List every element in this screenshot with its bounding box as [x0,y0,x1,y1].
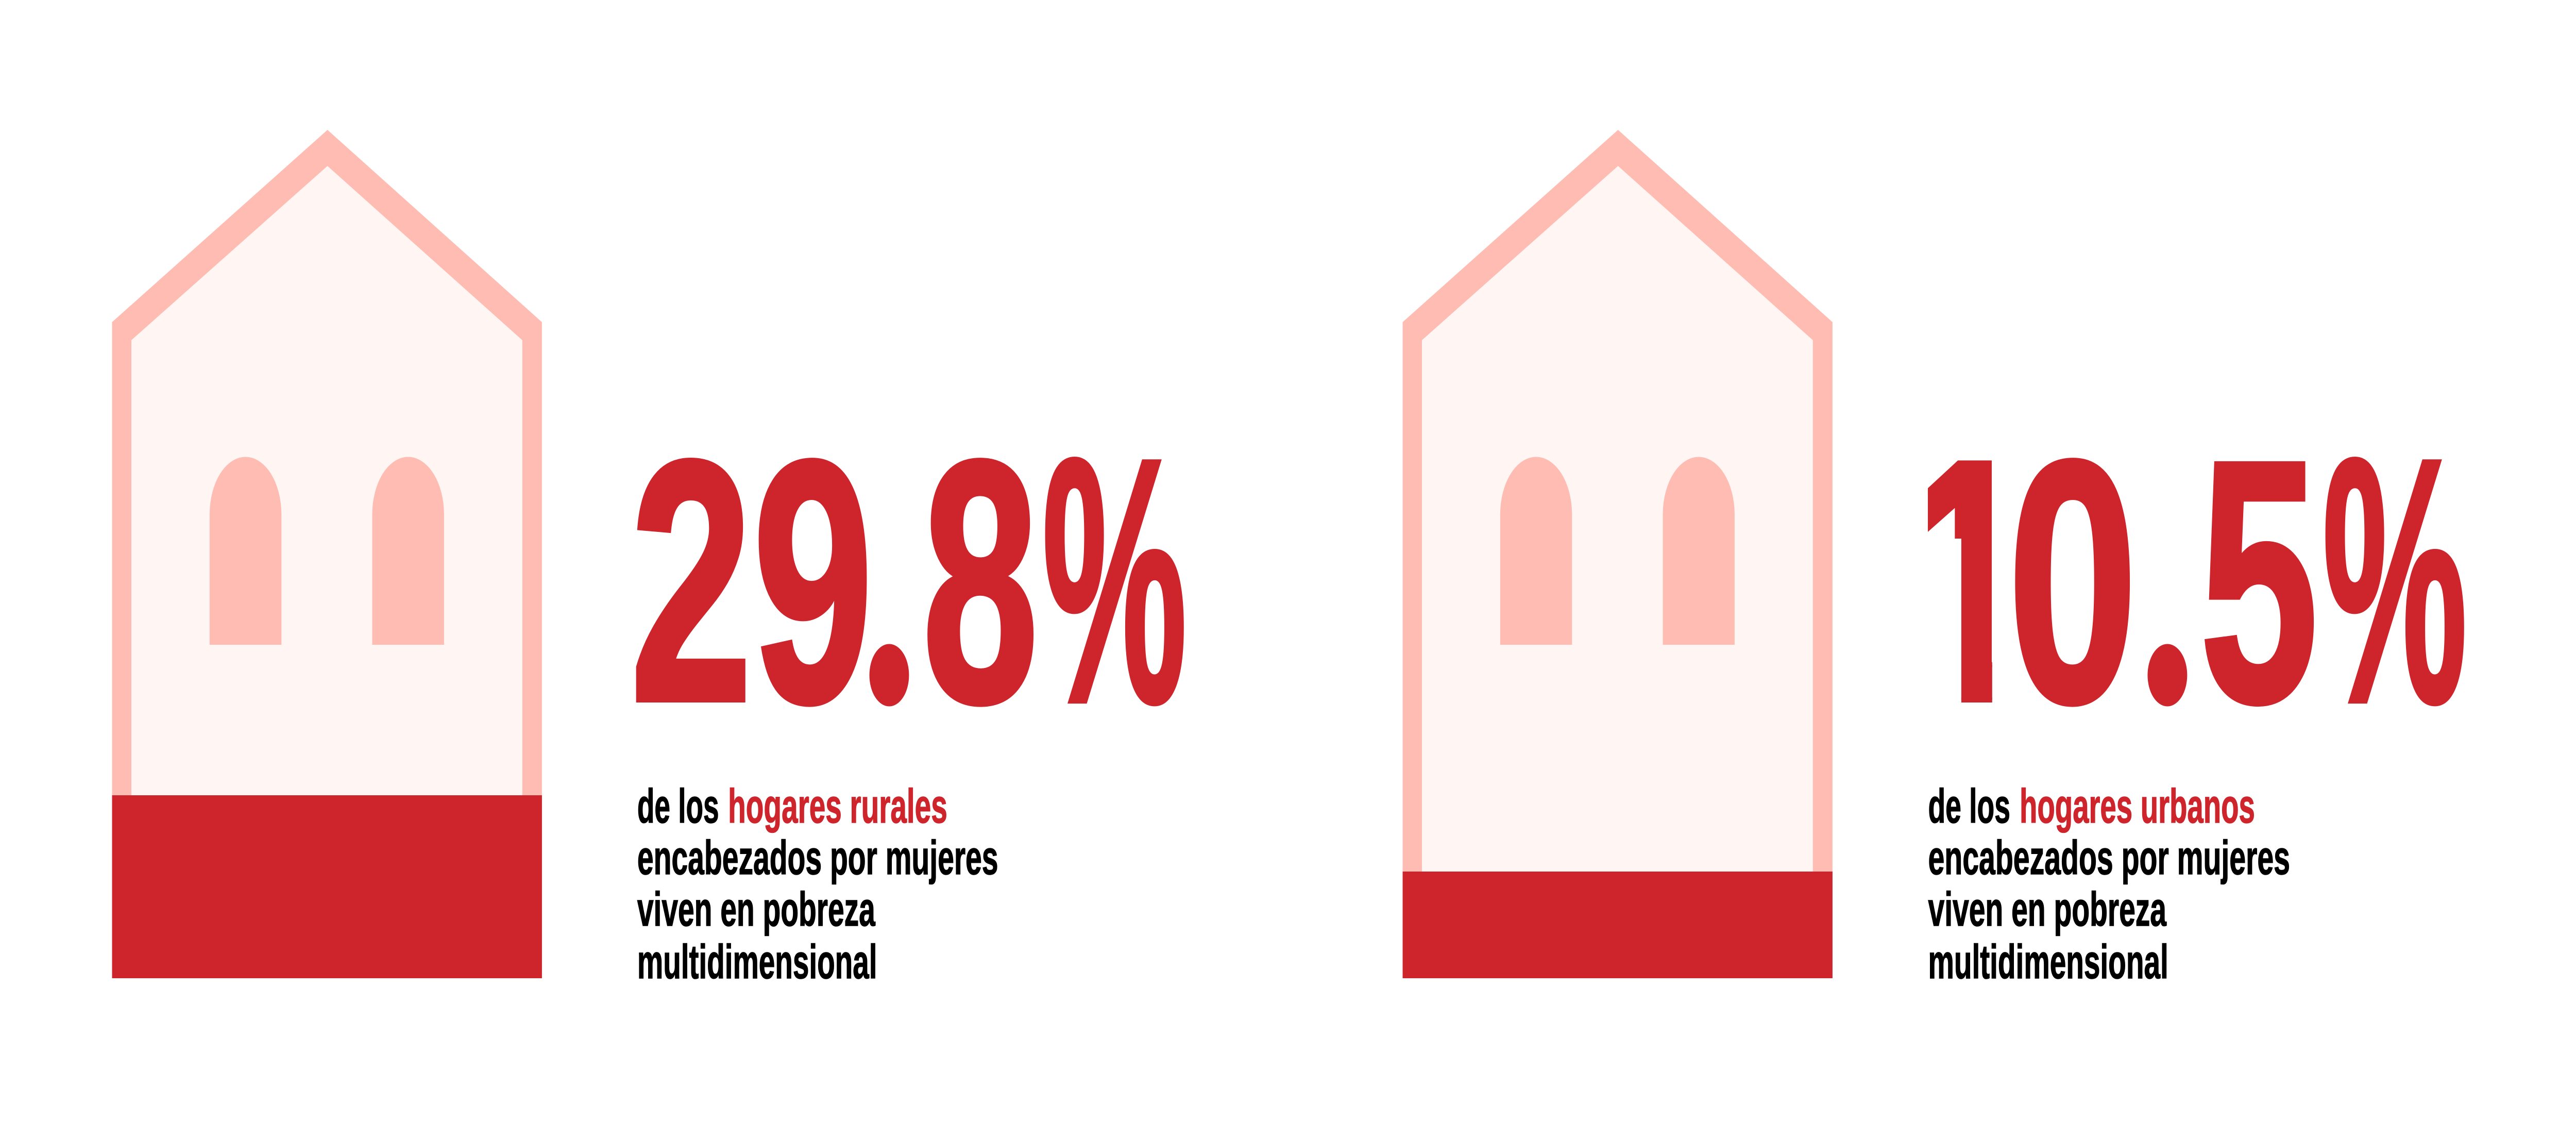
statistic: 29.8%: 2 [630,390,753,773]
description: rural households: hogares rurales [728,780,947,833]
description: rural households: encabezados por mujeres [637,831,998,884]
panel: urban households [1402,130,2467,989]
description: rural households: multidimensional [637,935,877,989]
description: urban households: multidimensional [1928,935,2168,989]
description: urban households: hogares urbanos [2020,780,2255,833]
icon: rural house filled to 29.8% [112,130,542,978]
description: urban households: viven en pobreza [1928,883,2167,936]
icon: urban house filled to 10.5% [1402,130,1833,978]
description: rural households: de los [637,780,719,833]
description: urban households: de los [1928,780,2010,833]
statistic: 29.8%: . [869,476,910,743]
statistic: 10.5%: 0 [2008,390,2138,775]
statistic: 10.5% [1928,457,2464,707]
description: urban households [1928,780,2290,989]
statistic: 10.5%: . [2147,476,2188,743]
panel: rural households [112,130,1187,989]
statistic: 29.8%: 9 [753,390,873,775]
description: urban households: encabezados por mujeres [1928,831,2290,884]
statistic: 10.5%: % [2323,388,2467,775]
statistic: 29.8%: 8 [922,390,1038,775]
statistic: 10.5%: 5 [2200,389,2318,774]
description: rural households [637,780,998,989]
statistic: 29.8%: % [1042,388,1187,775]
description: rural households: viven en pobreza [637,883,875,936]
statistic: 10.5%: 1 [1900,389,2035,773]
statistic: 29.8% [630,388,1187,775]
